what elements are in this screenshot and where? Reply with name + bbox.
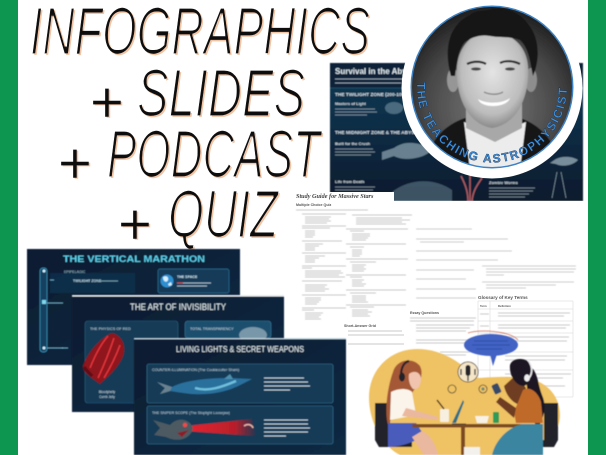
physics of red card: Bloodybelly — [99, 390, 116, 394]
person: left woman — [386, 360, 438, 455]
title: infographics + slides + podcast + quiz: + — [90, 70, 124, 135]
midnight zone section: THE MIDNIGHT ZONE & THE ABYSS — [335, 130, 419, 136]
physics of red card: Comb Jelly — [99, 395, 115, 399]
title: infographics + slides + podcast + quiz: + — [92, 71, 125, 136]
quiz answers column 3 — [416, 229, 512, 298]
illustration: two people recording a podcast — [369, 331, 560, 455]
sniper scope card: THE SNIPER SCOPE (The Stoplight Loosejaw) — [152, 411, 230, 415]
physics of red card — [83, 321, 178, 403]
icon: red jellyfish — [83, 333, 124, 384]
glossary of key terms table — [478, 295, 573, 397]
midnight zone section — [335, 130, 432, 160]
icon: red beam — [186, 419, 256, 436]
zombie worms section — [489, 157, 578, 198]
right green border — [588, 0, 606, 455]
panel: study guide document — [296, 192, 588, 411]
depth scale: EPIPELAGIC — [64, 270, 86, 274]
panel: deep sea infographic — [330, 63, 583, 201]
photo — [410, 5, 574, 170]
title: infographics + slides + podcast + quiz: + — [58, 131, 92, 196]
physics of red card: THE PHYSICS OF RED — [90, 327, 131, 331]
title: infographics + slides + podcast + quiz: + — [118, 192, 152, 257]
counter-illumination card — [147, 364, 333, 403]
portrait badge: the teaching astrophysicist — [402, 6, 582, 178]
study guide heading: Study Guide for Massive Stars — [296, 193, 374, 200]
total transparency card: TOTAL TRANSPARENCY — [190, 327, 234, 331]
icon: loosejaw fish — [153, 420, 193, 440]
green cup — [493, 412, 499, 423]
phone — [491, 383, 502, 395]
title: infographics + slides + podcast + quiz: SLIDES — [138, 58, 306, 132]
chairs — [375, 403, 558, 447]
infographic heading: Survival in the Abyss — [335, 67, 416, 76]
answers column 4 — [482, 266, 576, 288]
title: infographics + slides + podcast + quiz: + — [120, 193, 153, 258]
counter-illumination card: COUNTER-ILLUMINATION (The Cookiecutter Shark) — [152, 368, 239, 372]
title: infographics + slides + podcast + quiz — [30, 0, 372, 258]
slide: the art of invisibility — [72, 295, 284, 412]
title: infographics + slides + podcast + quiz: PODCAST — [107, 117, 323, 192]
essay questions: Essay Questions — [410, 311, 439, 315]
glossary of key terms table: Term — [480, 304, 487, 308]
short answer section: Short-Answer Grid — [344, 324, 376, 328]
the space callout: THE SPACE — [177, 275, 198, 279]
total transparency card — [185, 321, 271, 343]
short answer section — [344, 324, 404, 344]
life from death section — [335, 174, 482, 201]
person: right woman — [491, 359, 545, 455]
life from death section: Life from Death — [335, 179, 365, 184]
glossary of key terms table: Glossary of Key Terms — [478, 295, 528, 300]
depth scale: TWILIGHT ZONE — [73, 279, 102, 283]
slide heading: THE VERTICAL MARATHON — [63, 254, 205, 265]
sniper scope card — [147, 406, 333, 444]
twilight zone section: THE TWILIGHT ZONE (200-1000m) — [335, 92, 413, 98]
essay questions — [410, 311, 476, 355]
slide: living lights and secret weapons — [134, 338, 346, 455]
table with props — [412, 400, 522, 455]
yellow background blob — [369, 349, 560, 455]
quiz column 2 — [346, 215, 412, 316]
zombie worms section: Zombie Worms — [489, 180, 519, 185]
title: infographics + slides + podcast + quiz: + — [60, 132, 93, 197]
quiz column 1 — [296, 210, 368, 319]
depth scale — [40, 268, 118, 352]
title: infographics + slides + podcast + quiz: QUIZ — [170, 178, 281, 254]
circular badge text: THE TEACHING ASTROPHYSICIST — [416, 82, 567, 163]
multiple choice subheading: Multiple Choice Quiz — [296, 203, 332, 207]
speech bubble — [464, 331, 518, 366]
midnight zone section: Built for the Crush — [335, 141, 371, 146]
twilight zone section: Masters of Light — [335, 101, 367, 106]
icon: small audio badges — [448, 385, 487, 393]
the space callout — [158, 269, 229, 293]
title: infographics + slides + podcast + quiz: PODCAST — [108, 118, 324, 194]
icon: microphone badge — [458, 362, 478, 382]
cup — [440, 409, 449, 422]
tablet — [452, 400, 464, 423]
title: infographics + slides + podcast + quiz: SLIDES — [137, 56, 305, 131]
icon: glowing shark — [157, 374, 252, 394]
left green border — [0, 0, 18, 455]
glossary of key terms table: Definition — [498, 304, 511, 308]
title: infographics + slides + podcast + quiz: QUIZ — [168, 177, 279, 252]
slide heading: THE ART OF INVISIBILITY — [130, 302, 226, 312]
infographic intro text — [335, 79, 405, 83]
slide: the vertical marathon — [27, 249, 240, 365]
twilight zone section — [335, 92, 413, 115]
slide heading: LIVING LIGHTS & SECRET WEAPONS — [176, 344, 304, 354]
box — [464, 447, 480, 455]
bowl — [475, 416, 489, 423]
